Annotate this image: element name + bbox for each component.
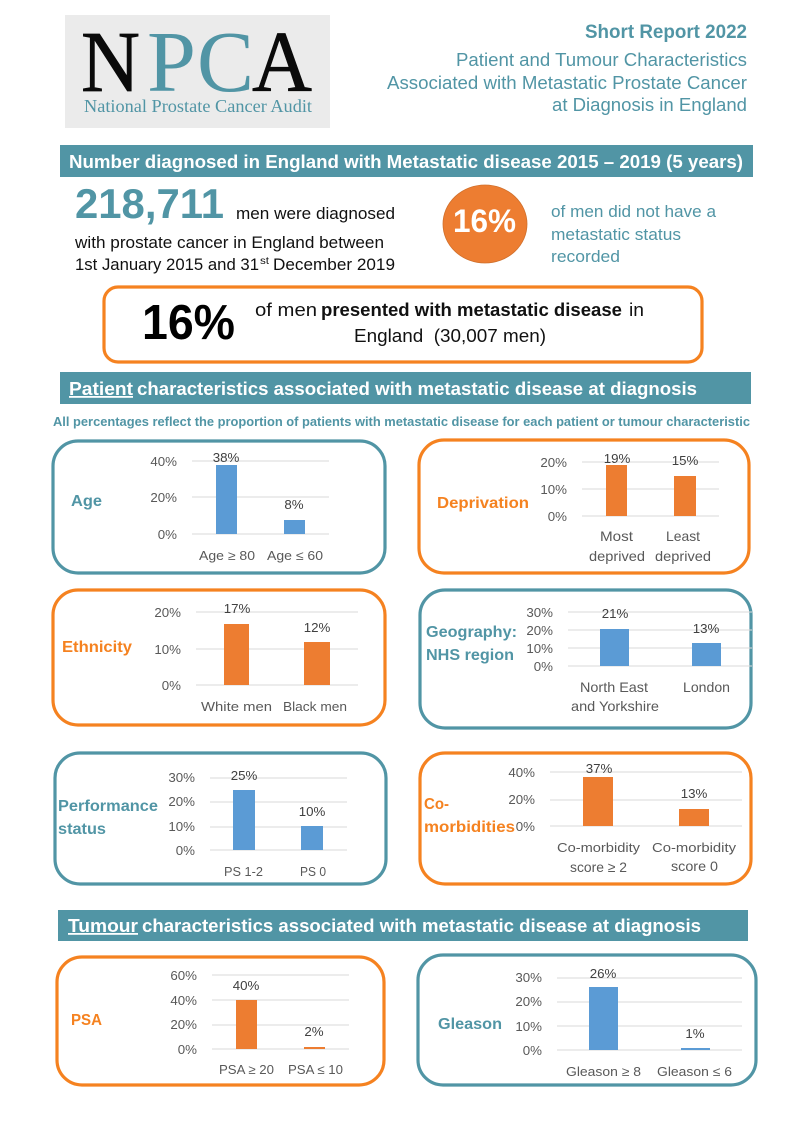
panel: Deprivation: Most — [600, 528, 633, 544]
panel: PSA: 60% — [170, 968, 197, 983]
callout: 16% no metastatic status: metastatic status — [551, 225, 681, 244]
panel: Co-morbidities: Co- — [424, 796, 449, 813]
panel: PSA: PSA ≤ 10 — [288, 1062, 343, 1077]
panel: Geography NHS region: 21% — [602, 606, 628, 621]
panel: PSA: 0% — [178, 1042, 197, 1057]
panel: Age: Age — [71, 493, 102, 510]
panel: 16% presented with metastatic disease: England (30,007 men) — [354, 326, 546, 346]
panel: Co-morbidities: 0% — [516, 819, 535, 834]
panel: Ethnicity: White men — [201, 699, 272, 714]
panel: Co-morbidities: morbidities — [424, 819, 515, 836]
panel: Ethnicity: Ethnicity — [62, 639, 132, 656]
panel: Geography NHS region: Geography: — [426, 624, 517, 641]
panel: Ethnicity: 10% — [154, 642, 181, 657]
banner: patient characteristics: Patient — [69, 379, 133, 399]
panel: Deprivation: 19% — [604, 451, 630, 466]
panel: PSA: PSA ≥ 20 — [219, 1062, 274, 1077]
report title: Patient and Tumour Characteristics — [456, 50, 747, 70]
report title — [387, 22, 747, 115]
panel: Geography NHS region: NHS region — [426, 647, 514, 664]
panel: Deprivation: 20% — [540, 455, 567, 470]
panel: 16% presented with metastatic disease: of men — [255, 300, 317, 320]
panel: Performance status: 10% — [168, 819, 195, 834]
statistic: 218,711 men diagnosed: December 2019 — [273, 255, 395, 274]
panel: Ethnicity: 12% — [304, 620, 330, 635]
banner: tumour characteristics — [58, 910, 748, 941]
panel: Gleason: 30% — [515, 970, 542, 985]
panel: Geography NHS region: 0% — [534, 659, 553, 674]
panel: Performance status: 0% — [176, 843, 195, 858]
panel: 16% presented with metastatic disease: 16% — [142, 296, 235, 350]
panel: Age: 0% — [158, 527, 177, 542]
panel: Gleason: Gleason ≥ 8 — [566, 1064, 641, 1079]
logo: NPCA: C — [197, 13, 254, 110]
panel: Ethnicity: Black men — [283, 699, 347, 714]
panel: Geography NHS region — [420, 590, 752, 728]
panel: Deprivation: Least — [666, 528, 700, 544]
panel: Ethnicity: 17% — [224, 601, 250, 616]
panel: Age: 38% — [213, 450, 239, 465]
panel: Geography NHS region: 20% — [526, 623, 553, 638]
callout: 16% no metastatic status: 16% — [453, 203, 516, 239]
panel: Gleason: 10% — [515, 1019, 542, 1034]
callout: 16% no metastatic status — [443, 185, 717, 266]
panel: PSA: 40% — [233, 978, 259, 993]
panel: Co-morbidities: Co-morbidity — [652, 840, 737, 855]
report title: Short Report 2022 — [585, 22, 747, 43]
statistic: 218,711 men diagnosed: 1st January 2015 and 31 — [75, 255, 259, 274]
panel: Age: Age ≥ 80 — [199, 548, 255, 563]
panel: Ethnicity — [53, 590, 385, 725]
panel: Geography NHS region: 30% — [526, 605, 553, 620]
banner: patient characteristics: characteristics associated with metastatic disease at diagnosis — [137, 379, 697, 399]
panel: Co-morbidities: 20% — [508, 792, 535, 807]
panel: PSA: 40% — [170, 993, 197, 1008]
panel: PSA: 20% — [170, 1017, 197, 1032]
banner: number diagnosed: Number diagnosed in England with Metastatic disease 2015 – 2019 (5 years) — [69, 152, 743, 172]
panel: 16% presented with metastatic disease: in — [629, 300, 644, 320]
panel: Performance status: 10% — [299, 804, 325, 819]
panel: Gleason: 1% — [685, 1026, 705, 1041]
statistic: 218,711 men diagnosed — [74, 180, 395, 274]
panel: Performance status: PS 0 — [300, 864, 326, 879]
panel: Gleason: Gleason ≤ 6 — [657, 1064, 732, 1079]
note: percentages explanation: All percentages reflect the proportion of patients with metastatic disease for each patient or tumour characteristic — [53, 415, 750, 429]
panel: Geography NHS region: North East — [580, 679, 648, 695]
panel: Deprivation: deprived — [655, 548, 711, 564]
panel: Performance status: Performance — [58, 798, 158, 815]
panel: Gleason: 0% — [523, 1043, 542, 1058]
panel: Deprivation: deprived — [589, 548, 645, 564]
panel: PSA: PSA — [71, 1012, 102, 1029]
statistic: 218,711 men diagnosed: men were diagnosed — [236, 204, 395, 223]
panel: PSA — [57, 957, 384, 1085]
panel: Gleason: Gleason — [438, 1016, 502, 1033]
panel: Age — [53, 441, 385, 573]
panel: 16% presented with metastatic disease — [104, 287, 702, 362]
callout: 16% no metastatic status: of men did not have a — [551, 202, 717, 221]
panel: Co-morbidities — [420, 753, 751, 884]
panel: Gleason — [418, 955, 756, 1085]
panel: Age: 40% — [150, 454, 177, 469]
panel: Age: 20% — [150, 490, 177, 505]
statistic: 218,711 men diagnosed: 218,711 — [75, 180, 224, 227]
panel: 16% presented with metastatic disease: presented with metastatic disease — [321, 300, 622, 320]
report title: Associated with Metastatic Prostate Cancer — [387, 73, 747, 93]
panel: Ethnicity: 0% — [162, 678, 181, 693]
panel: Geography NHS region: London — [683, 679, 730, 695]
logo: NPCA: N — [81, 13, 140, 110]
panel: Performance status: status — [58, 821, 106, 838]
logo: NPCA: National Prostate Cancer Audit — [84, 96, 312, 116]
statistic: 218,711 men diagnosed: with prostate cancer in England between — [74, 233, 384, 252]
panel: Deprivation: Deprivation — [437, 495, 529, 512]
panel: Deprivation — [419, 440, 749, 573]
panel: Age: 8% — [284, 497, 304, 512]
panel: Performance status: 30% — [168, 770, 195, 785]
panel: PSA: 2% — [304, 1024, 324, 1039]
panel: Co-morbidities: 37% — [586, 761, 612, 776]
panel: Deprivation: 15% — [672, 453, 698, 468]
callout: 16% no metastatic status: recorded — [551, 247, 620, 266]
panel: Performance status: 20% — [168, 794, 195, 809]
panel: Gleason: 20% — [515, 994, 542, 1009]
statistic: 218,711 men diagnosed: st — [260, 256, 269, 267]
banner: tumour characteristics: Tumour — [68, 916, 138, 936]
panel: Geography NHS region: 10% — [526, 641, 553, 656]
banner: number diagnosed — [60, 145, 753, 177]
panel: Co-morbidities: Co-morbidity — [557, 840, 641, 855]
panel: Age: Age ≤ 60 — [267, 548, 323, 563]
panel: Geography NHS region: and Yorkshire — [571, 698, 659, 714]
panel: Gleason: 26% — [590, 966, 616, 981]
panel: Performance status — [55, 753, 386, 884]
logo: NPCA: P — [147, 13, 196, 110]
panel: Geography NHS region: 13% — [693, 621, 719, 636]
report title: at Diagnosis in England — [552, 95, 747, 115]
panel: Co-morbidities: score 0 — [671, 858, 718, 874]
banner: tumour characteristics: characteristics associated with metastatic disease at diagnosis — [142, 916, 701, 936]
panel: Performance status: 25% — [231, 768, 257, 783]
panel: Deprivation: 0% — [548, 509, 567, 524]
logo: NPCA — [65, 13, 330, 128]
logo: NPCA: A — [252, 13, 312, 110]
panel: Co-morbidities: score ≥ 2 — [570, 859, 627, 875]
banner: patient characteristics — [60, 372, 751, 404]
panel: Co-morbidities: 40% — [508, 765, 535, 780]
panel: Deprivation: 10% — [540, 482, 567, 497]
panel: Ethnicity: 20% — [154, 605, 181, 620]
panel: Co-morbidities: 13% — [681, 786, 707, 801]
panel: Performance status: PS 1-2 — [224, 864, 263, 879]
